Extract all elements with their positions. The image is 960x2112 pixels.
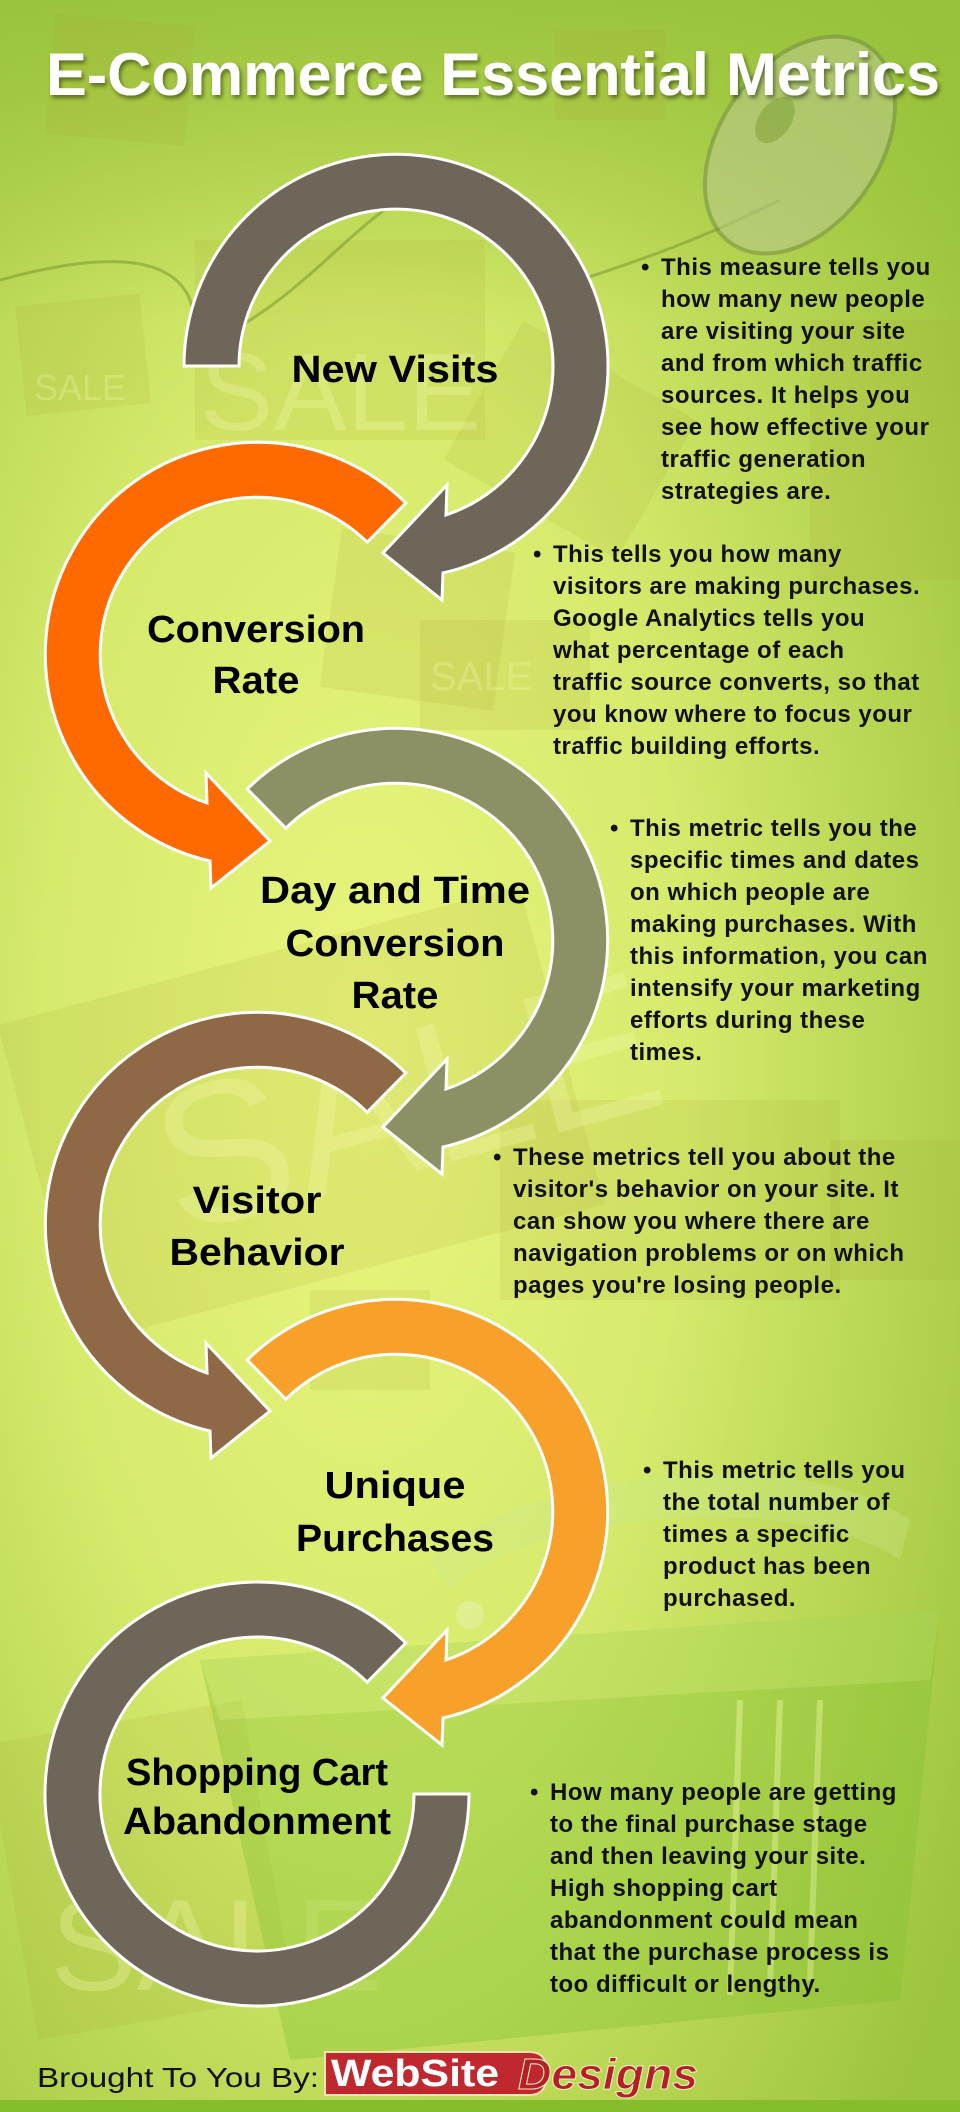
logo: WebSite Designs [325, 2050, 698, 2099]
label: Visitor Behavior: Behavior [170, 1232, 345, 1274]
text block: conversion rate description: • [533, 541, 542, 568]
text block: cart abandonment description: How many people are getting [550, 1779, 897, 1806]
text block: new visits description: are visiting your site [661, 318, 905, 345]
text block: unique purchases description: • [643, 1457, 652, 1484]
text block: cart abandonment description: High shopping cart [550, 1875, 778, 1902]
icon: shopping basket [200, 1474, 940, 2060]
text block: day and time description: intensify your marketing [630, 975, 921, 1002]
text block: visitor behavior description: visitor's behavior on your site. It [513, 1176, 899, 1203]
label: Unique Purchases: Unique [324, 1465, 466, 1507]
text block: new visits description: This measure tells you [661, 254, 931, 281]
text block: visitor behavior description: • [493, 1144, 502, 1171]
text block: cart abandonment description: abandonment could mean [550, 1907, 858, 1934]
text block: cart abandonment description: that the purchase process is [550, 1939, 889, 1966]
text block: new visits description: • [641, 254, 650, 281]
icon: computer mouse [666, 1, 934, 289]
text block: day and time description [610, 815, 928, 1066]
arrow ring 3: day and time conversion rate [247, 728, 608, 1174]
footer: credit text: Brought To You By: [37, 2062, 319, 2093]
text block: visitor behavior description: These metrics tell you about the [513, 1144, 896, 1171]
text block: new visits description: traffic generation [661, 446, 866, 473]
text block: conversion rate description: what percentage of each [552, 637, 845, 664]
label: Conversion Rate: Conversion [147, 609, 365, 651]
text block: new visits description: and from which traffic [661, 350, 923, 377]
text block: day and time description: making purchases. With [630, 911, 917, 938]
label: Day and Time Conversion Rate: Day and Time [260, 870, 530, 912]
text block: conversion rate description: Google Analytics tells you [553, 605, 865, 632]
label: Day and Time Conversion Rate: Conversion [286, 923, 504, 965]
text: SALE [131, 928, 683, 1276]
text block: new visits description: see how effective your [661, 414, 929, 441]
text: SALE [200, 331, 481, 454]
text block: cart abandonment description: too difficult or lengthy. [550, 1971, 821, 1998]
text block: cart abandonment description: and then leaving your site. [550, 1843, 866, 1870]
text block: unique purchases description: the total number of [663, 1489, 890, 1516]
label: Visitor Behavior [170, 1180, 345, 1274]
label: Unique Purchases [296, 1465, 494, 1560]
text block: new visits description: sources. It helps you [661, 382, 910, 409]
text: SALE [430, 655, 532, 699]
footer bar [0, 2100, 960, 2112]
arrow ring 2: conversion rate [45, 442, 406, 888]
text: SALE [34, 367, 126, 408]
text block: unique purchases description: This metric tells you [663, 1457, 906, 1484]
text block: visitor behavior description: navigation problems or on which [513, 1240, 905, 1267]
text block: visitor behavior description: can show you where there are [513, 1208, 870, 1235]
label: Shopping Cart Abandonment [123, 1752, 391, 1843]
title: E-Commerce Essential Metrics [46, 41, 940, 108]
text block: unique purchases description: times a specific [663, 1521, 850, 1548]
label: Shopping Cart Abandonment: Abandonment [123, 1801, 391, 1843]
text block: day and time description: • [610, 815, 619, 842]
arrow ring 4: visitor behavior [45, 1012, 406, 1458]
logo: WebSite Designs: Designs [518, 2050, 698, 2099]
text block: visitor behavior description: pages you're losing people. [513, 1272, 842, 1299]
text block: day and time description: this information, you can [630, 943, 928, 970]
arrow ring 5: unique purchases [247, 1299, 608, 1745]
text: SALE [50, 1872, 382, 2018]
text block: new visits description [641, 254, 931, 505]
text block: conversion rate description: This tells you how many [553, 541, 842, 568]
label: Shopping Cart Abandonment: Shopping Cart [126, 1752, 388, 1794]
logo: WebSite Designs: WebSite [331, 2053, 499, 2095]
label: Day and Time Conversion Rate [260, 870, 530, 1017]
text block: new visits description: strategies are. [661, 478, 831, 505]
text block: unique purchases description: product has been [663, 1553, 871, 1580]
text block: visitor behavior description [493, 1144, 905, 1299]
label: Day and Time Conversion Rate: Rate [352, 975, 438, 1017]
arrow ring 6: shopping cart abandonment [45, 1582, 469, 2006]
text block: unique purchases description [643, 1457, 906, 1612]
label: Conversion Rate: Rate [212, 660, 300, 702]
text block: unique purchases description: purchased. [663, 1585, 796, 1612]
text block: day and time description: on which people are [630, 879, 870, 906]
text block: cart abandonment description [530, 1779, 897, 1998]
label: Unique Purchases: Purchases [296, 1518, 494, 1560]
label: New Visits: New Visits [292, 349, 498, 391]
text block: conversion rate description: visitors are making purchases. [553, 573, 920, 600]
label: Visitor Behavior: Visitor [192, 1180, 322, 1222]
text block: conversion rate description: you know where to focus your [553, 701, 912, 728]
text block: day and time description: This metric tells you the [630, 815, 917, 842]
text block: conversion rate description: traffic source converts, so that [553, 669, 920, 696]
text block: conversion rate description: traffic building efforts. [553, 733, 820, 760]
text block: day and time description: specific times and dates [630, 847, 919, 874]
text block: cart abandonment description: to the final purchase stage [550, 1811, 868, 1838]
text block: conversion rate description [533, 541, 920, 760]
text block: day and time description: efforts during these [630, 1007, 865, 1034]
text block: cart abandonment description: • [530, 1779, 539, 1806]
text block: day and time description: times. [630, 1039, 702, 1066]
arrow ring 1: new visits [184, 154, 608, 600]
label: Conversion Rate [147, 609, 365, 702]
mouse cable [0, 180, 780, 333]
text block: new visits description: how many new people [661, 286, 925, 313]
